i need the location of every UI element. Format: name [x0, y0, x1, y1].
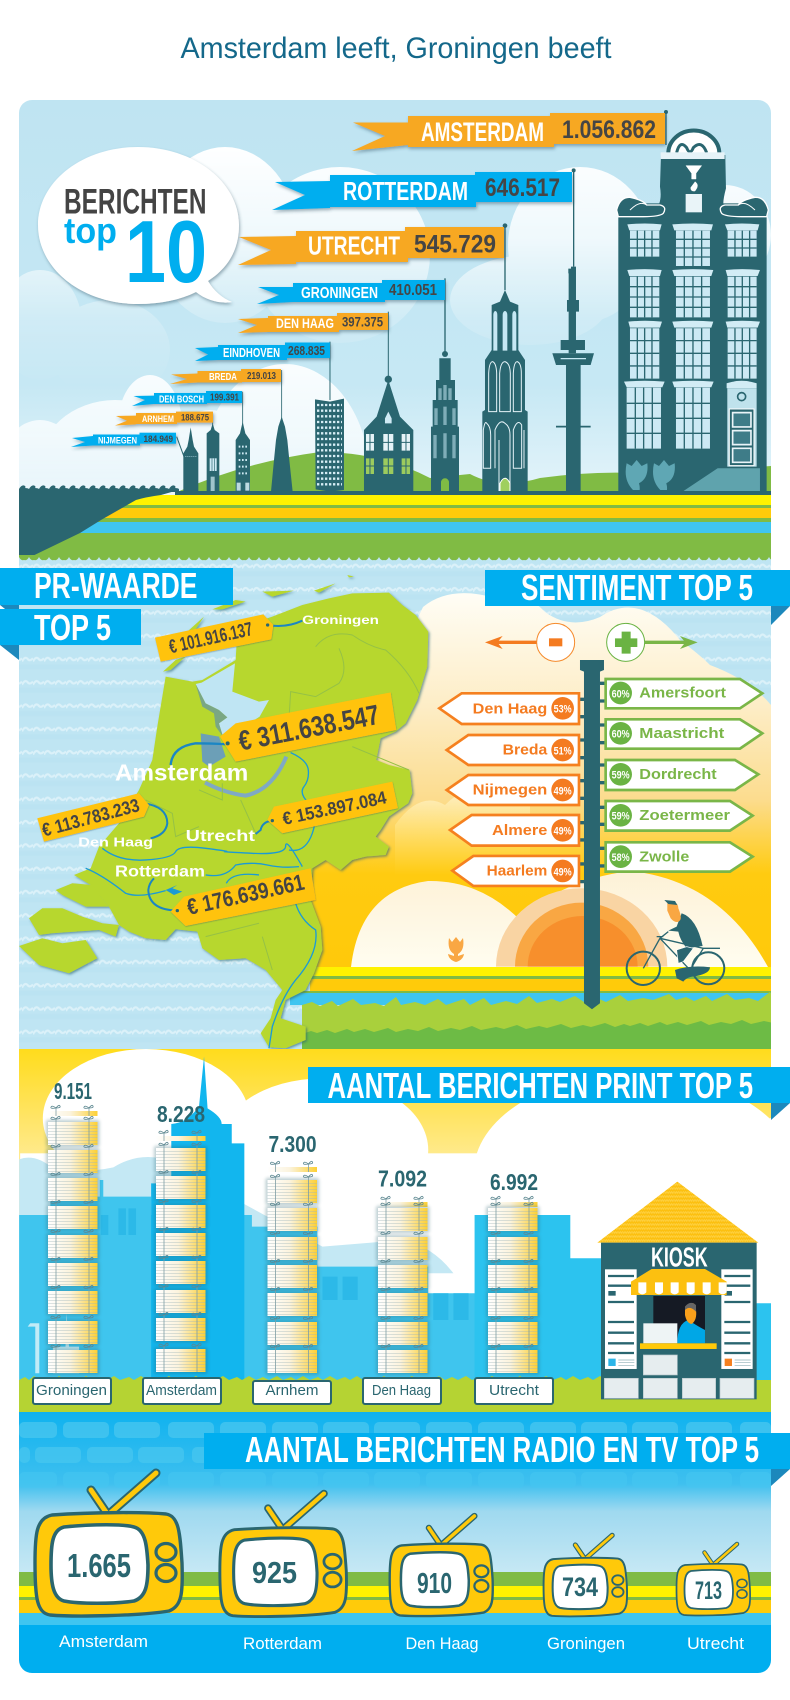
tv: Den Haag	[390, 1516, 493, 1616]
sign: Den Haag: Den Haag	[473, 701, 547, 717]
minus indicator	[485, 623, 575, 661]
tv: Groningen: 734	[562, 1572, 598, 1602]
banner: Den Haag: DEN HAAG	[276, 315, 334, 331]
tv: Utrecht	[676, 1544, 750, 1615]
tv: Groningen	[544, 1535, 627, 1616]
windows	[627, 231, 757, 449]
sign: Den Haag: 53%	[554, 704, 572, 716]
sign: Breda	[447, 735, 579, 765]
nameplate: Groningen	[33, 1378, 111, 1404]
banner: Den Bosch	[132, 391, 242, 406]
heading: top 5: TOP 5	[34, 607, 111, 648]
sign: Amersfoort	[606, 679, 762, 708]
nameplate: Arnhem: Arnhem	[266, 1382, 318, 1399]
nameplate: Amsterdam: Amsterdam	[146, 1382, 217, 1399]
banners: berichten ranking	[71, 113, 665, 447]
map: city labels: Amsterdam	[115, 760, 248, 786]
nameplate: Utrecht: Utrecht	[489, 1382, 540, 1399]
map: province borders	[146, 634, 419, 970]
sign: Zwolle	[606, 842, 753, 872]
value: Groningen print: 9.151	[54, 1078, 92, 1104]
tv: Rotterdam	[220, 1494, 347, 1617]
tag: Rotterdam value: € 176.639.661	[184, 869, 307, 920]
banner: Amsterdam: 1.056.862	[562, 116, 656, 144]
sign: Zoetermeer: 59%	[612, 811, 630, 823]
tv labels: Rotterdam	[243, 1634, 322, 1653]
sign: Nijmegen: 49%	[554, 785, 572, 797]
nameplate: Utrecht	[475, 1378, 553, 1404]
banner: Arnhem	[115, 412, 213, 426]
banner: Groningen: 410.051	[389, 282, 437, 299]
sign: Maastricht	[606, 719, 762, 749]
brick wall	[19, 1422, 771, 1488]
banner: Groningen: GRONINGEN	[301, 285, 378, 302]
sign: Zwolle: 58%	[612, 852, 630, 864]
stack: Amsterdam	[154, 1130, 208, 1374]
stack: Den Haag	[376, 1196, 430, 1375]
stack: Arnhem	[266, 1161, 319, 1375]
banner: Eindhoven	[195, 342, 330, 361]
warm clouds	[300, 593, 771, 967]
building: canal house	[617, 110, 768, 493]
map: city labels: Rotterdam	[115, 863, 205, 880]
sign: Nijmegen	[447, 775, 579, 805]
title: Amsterdam leeft, Groningen beeft	[180, 32, 612, 65]
tower: Nijmegen	[177, 427, 198, 492]
tag: Groningen value: € 101.916.137	[167, 619, 255, 658]
heading: top 5	[0, 607, 141, 660]
tv: Amsterdam	[35, 1473, 182, 1616]
ground bands right	[290, 967, 790, 1050]
tag: Den Haag value: € 113.783.233	[40, 794, 142, 841]
heading: PR-waarde	[0, 565, 233, 620]
value: Arnhem print: 7.300	[268, 1131, 316, 1157]
tag: Amsterdam value	[171, 692, 396, 765]
sign: Amersfoort: Amersfoort	[639, 686, 726, 702]
sign: Haarlem: 49%	[554, 866, 572, 878]
kiosk	[597, 1182, 758, 1399]
nameplate: Den Haag	[363, 1378, 441, 1404]
door	[727, 388, 757, 467]
tv labels	[59, 1632, 744, 1653]
sign: Dordrecht: 59%	[612, 770, 630, 782]
window caps	[624, 223, 760, 388]
banner: Amsterdam: AMSTERDAM	[421, 117, 544, 147]
value: Den Haag print: 7.092	[378, 1166, 427, 1192]
banner: Den Haag	[238, 313, 388, 333]
sun	[496, 888, 667, 967]
sky background	[19, 100, 771, 495]
heading: sentiment	[485, 567, 790, 625]
map: city labels: Groningen	[302, 613, 379, 627]
sign: Den Haag	[439, 693, 579, 724]
lower clouds	[19, 364, 364, 486]
sign: Zoetermeer: Zoetermeer	[639, 808, 730, 824]
map: city labels	[78, 613, 379, 880]
mid cloud bump	[395, 797, 530, 861]
tag: Utrecht value: € 153.897.084	[281, 787, 388, 829]
tower: Arnhem	[207, 413, 219, 492]
tv labels: Amsterdam	[59, 1632, 148, 1651]
banner: Amsterdam	[352, 113, 665, 151]
sun domes	[351, 871, 768, 967]
wave strip	[19, 485, 179, 492]
upper clouds	[19, 147, 771, 336]
banner: Breda: 219.013	[247, 370, 276, 382]
tower: Den Bosch	[236, 392, 250, 492]
speech bubble: berichten top 10: 10	[125, 202, 207, 301]
speech bubble: berichten top 10: top	[64, 210, 117, 251]
stack: Utrecht	[486, 1196, 540, 1375]
plus indicator	[607, 623, 698, 661]
sign: Almere	[450, 815, 579, 846]
sign: Nijmegen: Nijmegen	[473, 783, 547, 799]
sign: Almere: Almere	[492, 823, 547, 839]
banner: Nijmegen: 184.949	[144, 434, 173, 445]
banner: Den Bosch: DEN BOSCH	[159, 394, 204, 406]
sign: Haarlem	[452, 856, 579, 886]
panel: berichten top 10 scene	[19, 100, 771, 555]
sign: Zwolle: Zwolle	[639, 849, 689, 865]
dark dike	[19, 492, 172, 555]
tag: Utrecht value	[256, 782, 398, 834]
map: city labels: Utrecht	[186, 828, 255, 845]
kiosk: KIOSK	[651, 1242, 708, 1273]
icon: cyclist	[627, 900, 724, 985]
tower: Groningen Martini	[431, 278, 459, 492]
sentiment signpost	[439, 623, 762, 1009]
sign: Amersfoort: 60%	[612, 688, 630, 700]
sign: Maastricht: Maastricht	[639, 726, 724, 742]
tv labels: Den Haag	[406, 1634, 478, 1653]
tv: Amsterdam: 1.665	[67, 1547, 131, 1584]
tower: Eindhoven	[315, 342, 344, 492]
map: IJsselmeer water	[196, 663, 269, 737]
sign: Maastricht: 60%	[612, 729, 630, 741]
tower: Euromast	[552, 168, 594, 493]
panel: radio en tv scene	[19, 1412, 771, 1673]
map: Netherlands	[19, 575, 428, 1048]
tv: Rotterdam: 925	[252, 1555, 297, 1590]
building: Den Haag	[364, 312, 413, 492]
sign: Breda: Breda	[503, 743, 548, 759]
sign: Haarlem: Haarlem	[487, 864, 547, 880]
banner: Den Haag: 397.375	[342, 314, 383, 330]
ground bands	[19, 491, 771, 556]
sign: Dordrecht	[606, 760, 758, 790]
speech bubble: berichten top 10: BERICHTEN	[64, 182, 206, 222]
banner: Groningen	[257, 280, 445, 304]
map: city labels: Den Haag	[78, 836, 153, 850]
banner: Utrecht	[238, 227, 504, 265]
banner: Eindhoven: EINDHOVEN	[223, 346, 280, 360]
value: Amsterdam print: 8.228	[157, 1101, 205, 1127]
sign: Dordrecht: Dordrecht	[639, 767, 717, 783]
banner: Nijmegen: NIJMEGEN	[98, 436, 137, 447]
sign: Zoetermeer	[606, 801, 753, 831]
tower: Breda	[271, 370, 293, 492]
banner: Utrecht: UTRECHT	[308, 230, 400, 260]
nameplate: Amsterdam	[143, 1378, 221, 1404]
white clouds	[20, 1049, 790, 1387]
ground stripes	[19, 1572, 771, 1673]
blue city skyline	[19, 1057, 771, 1380]
map: rivers	[86, 753, 316, 1048]
banner: Arnhem: 188.675	[181, 412, 210, 423]
sign: Almere: 49%	[554, 826, 572, 838]
pale blue clouds	[19, 1157, 453, 1273]
skyline: right buildings	[431, 110, 768, 493]
tulips	[626, 460, 675, 490]
banner: Breda: BREDA	[209, 372, 237, 383]
banner: Breda	[170, 369, 281, 384]
stack: Groningen	[46, 1105, 100, 1375]
icon: tulip	[448, 937, 464, 962]
banner: Den Bosch: 199.391	[210, 392, 239, 404]
banner: Eindhoven: 268.835	[288, 344, 325, 358]
grass strip	[19, 1376, 790, 1412]
panel: section 2 background	[19, 555, 790, 1050]
banner: Nijmegen	[71, 433, 176, 447]
nameplate: Groningen: Groningen	[36, 1382, 107, 1399]
banner: Rotterdam	[272, 172, 572, 210]
banner: Rotterdam: 646.517	[485, 174, 560, 202]
tv: Utrecht: 713	[695, 1577, 722, 1605]
heading: PR-waarde: PR-WAARDE	[34, 565, 198, 606]
skyline: left towers	[177, 312, 413, 492]
green hills	[180, 452, 771, 491]
banner: Rotterdam: ROTTERDAM	[343, 176, 468, 206]
tower: Dom Utrecht	[482, 223, 528, 492]
panel: print top 5 scene	[19, 1049, 790, 1412]
banner: Arnhem: ARNHEM	[142, 414, 174, 425]
tv: Den Haag: 910	[417, 1568, 452, 1600]
tag: Rotterdam value	[148, 868, 316, 926]
nameplate: Den Haag: Den Haag	[372, 1382, 431, 1399]
value: Utrecht print: 6.992	[490, 1169, 538, 1195]
tv labels: Utrecht	[687, 1634, 744, 1653]
nameplate: Arnhem	[253, 1381, 331, 1404]
speech bubble: berichten top 10	[38, 147, 239, 304]
tv labels: Groningen	[547, 1634, 625, 1653]
tag: Amsterdam value: € 311.638.547	[236, 699, 382, 757]
heading: radio en tv	[204, 1429, 790, 1486]
banner: Utrecht: 545.729	[414, 230, 496, 258]
post	[580, 660, 604, 1009]
sign: Breda: 51%	[554, 745, 572, 757]
